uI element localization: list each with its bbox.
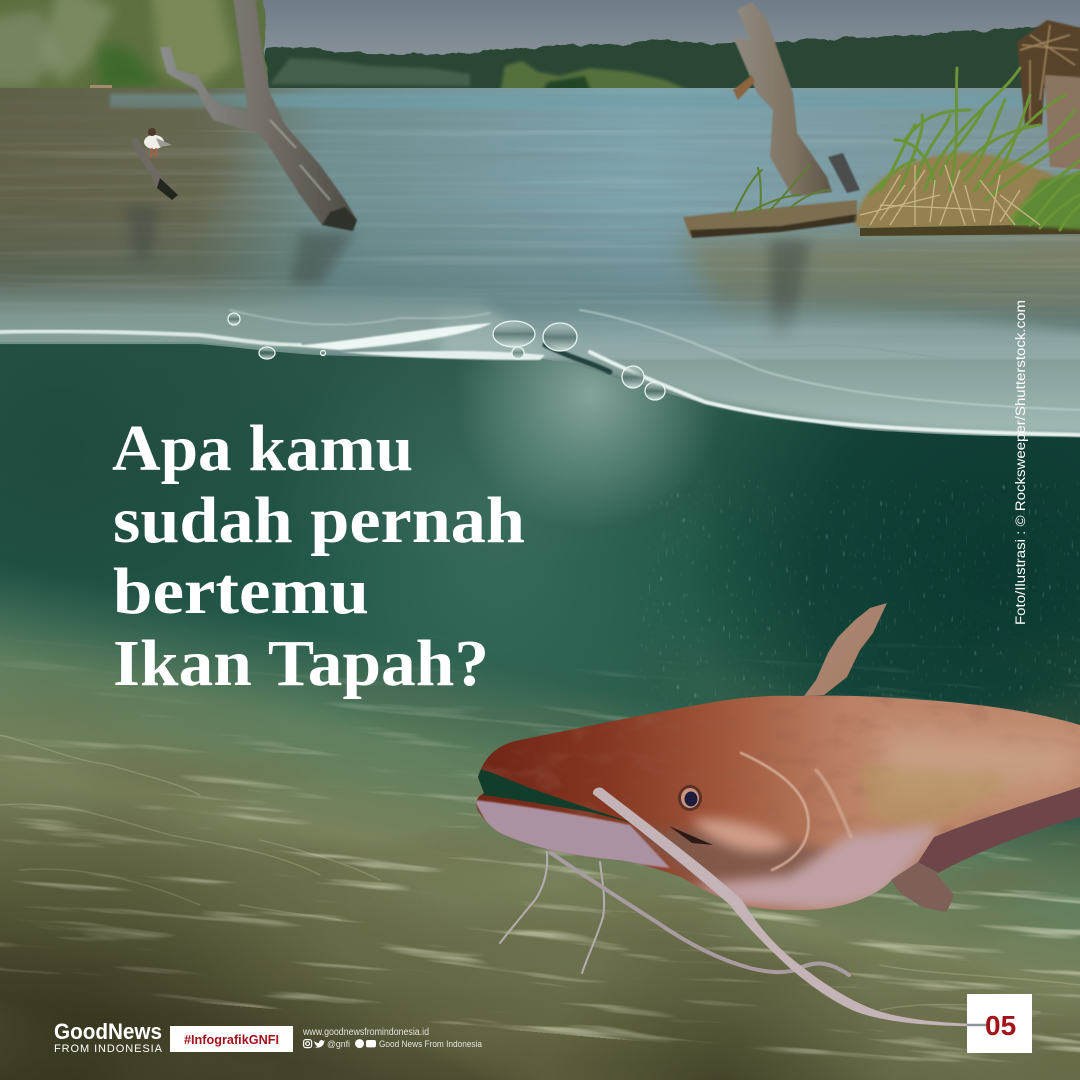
fish: main barbel: [593, 787, 990, 1026]
waterline lower crest: [340, 351, 545, 360]
title: Apa kamu: [112, 412, 413, 485]
footer website: www.goodnewsfromindonesia.id: [302, 1027, 429, 1038]
tree: right post with nest: [1017, 20, 1080, 170]
background: distant tree line: [262, 27, 1080, 96]
fish: dorsal fin: [804, 603, 887, 696]
fish: cheek highlight: [690, 819, 790, 852]
fish: under cheek shade: [630, 830, 830, 885]
footer social icons and handles: [304, 1039, 483, 1050]
fish: lower barbel: [551, 853, 849, 975]
footer logo: GoodNews from Indonesia: [54, 1019, 163, 1055]
title: bertemu: [113, 555, 369, 628]
underwater: bottom-left shadow: [0, 820, 329, 1080]
photo credit: Foto/Ilustrasi : © Rocksweeper/Shutterstock.com: [1013, 300, 1028, 625]
water surface sheen right: [440, 300, 1080, 440]
underwater: dark top-left: [0, 396, 130, 526]
fish: gill lines: [741, 753, 851, 870]
background: left tree bank: [0, 0, 268, 95]
water surface sheen left: [0, 275, 560, 360]
waterline white crest: [290, 323, 492, 350]
fish: eye: [678, 785, 702, 811]
footer logo: GoodNews from Indonesia: GoodNews: [54, 1019, 162, 1044]
icon: perched bird: [144, 128, 172, 158]
underwater: deep right shadow: [736, 421, 1080, 725]
underwater: caustic light lines: [0, 735, 1080, 1012]
fish: yellow flank: [868, 765, 1006, 820]
icon: instagram: [304, 1040, 312, 1048]
background: sky: [0, 0, 1080, 100]
footer hashtag badge: [170, 1026, 293, 1052]
fish: lower belly: [690, 825, 940, 910]
page name: Good News From Indonesia: [379, 1039, 483, 1050]
tree: right dead trunk and log: [683, 2, 860, 238]
fish: thin barbels: [500, 852, 604, 973]
underwater: sun rays: [348, 378, 652, 666]
background: lake surface: [0, 88, 1080, 360]
handle: @gnfi: [327, 1039, 350, 1050]
footer logo: GoodNews from Indonesia: FROM INDONESIA: [54, 1043, 163, 1055]
footer hashtag badge: #InfografikGNFI: [184, 1032, 279, 1047]
icon: youtube: [366, 1040, 376, 1047]
waterline highlights: [0, 310, 1080, 435]
underwater: bottom-right shadow: [578, 946, 860, 1080]
underwater: floating particles: [640, 480, 1080, 740]
icon: twitter: [314, 1040, 325, 1048]
fish: ikan tapah: [470, 603, 1080, 1026]
tree: small branch with bird: [131, 128, 178, 200]
page number box: 05: [985, 1010, 1016, 1041]
fish: pale mid highlight: [880, 725, 1080, 800]
fish: mouth corner: [669, 826, 713, 845]
underwater scene: [0, 340, 1080, 1080]
fish: pectoral fin: [891, 862, 954, 912]
title: [112, 412, 525, 700]
fish: anal fin: [918, 787, 1080, 873]
tree: left dead trunk: [160, 0, 357, 231]
fish: lower jaw: [474, 800, 670, 868]
page number box: [967, 994, 1032, 1053]
underwater: sandy river bed: [0, 560, 1080, 1080]
fish: body: [470, 690, 1080, 915]
water bubbles: [228, 313, 665, 400]
icon: facebook: [355, 1039, 364, 1048]
title: Ikan Tapah?: [113, 627, 489, 700]
grass clump: [732, 68, 1080, 236]
title: sudah pernah: [113, 484, 525, 557]
fish: mouth stripe: [478, 770, 630, 822]
